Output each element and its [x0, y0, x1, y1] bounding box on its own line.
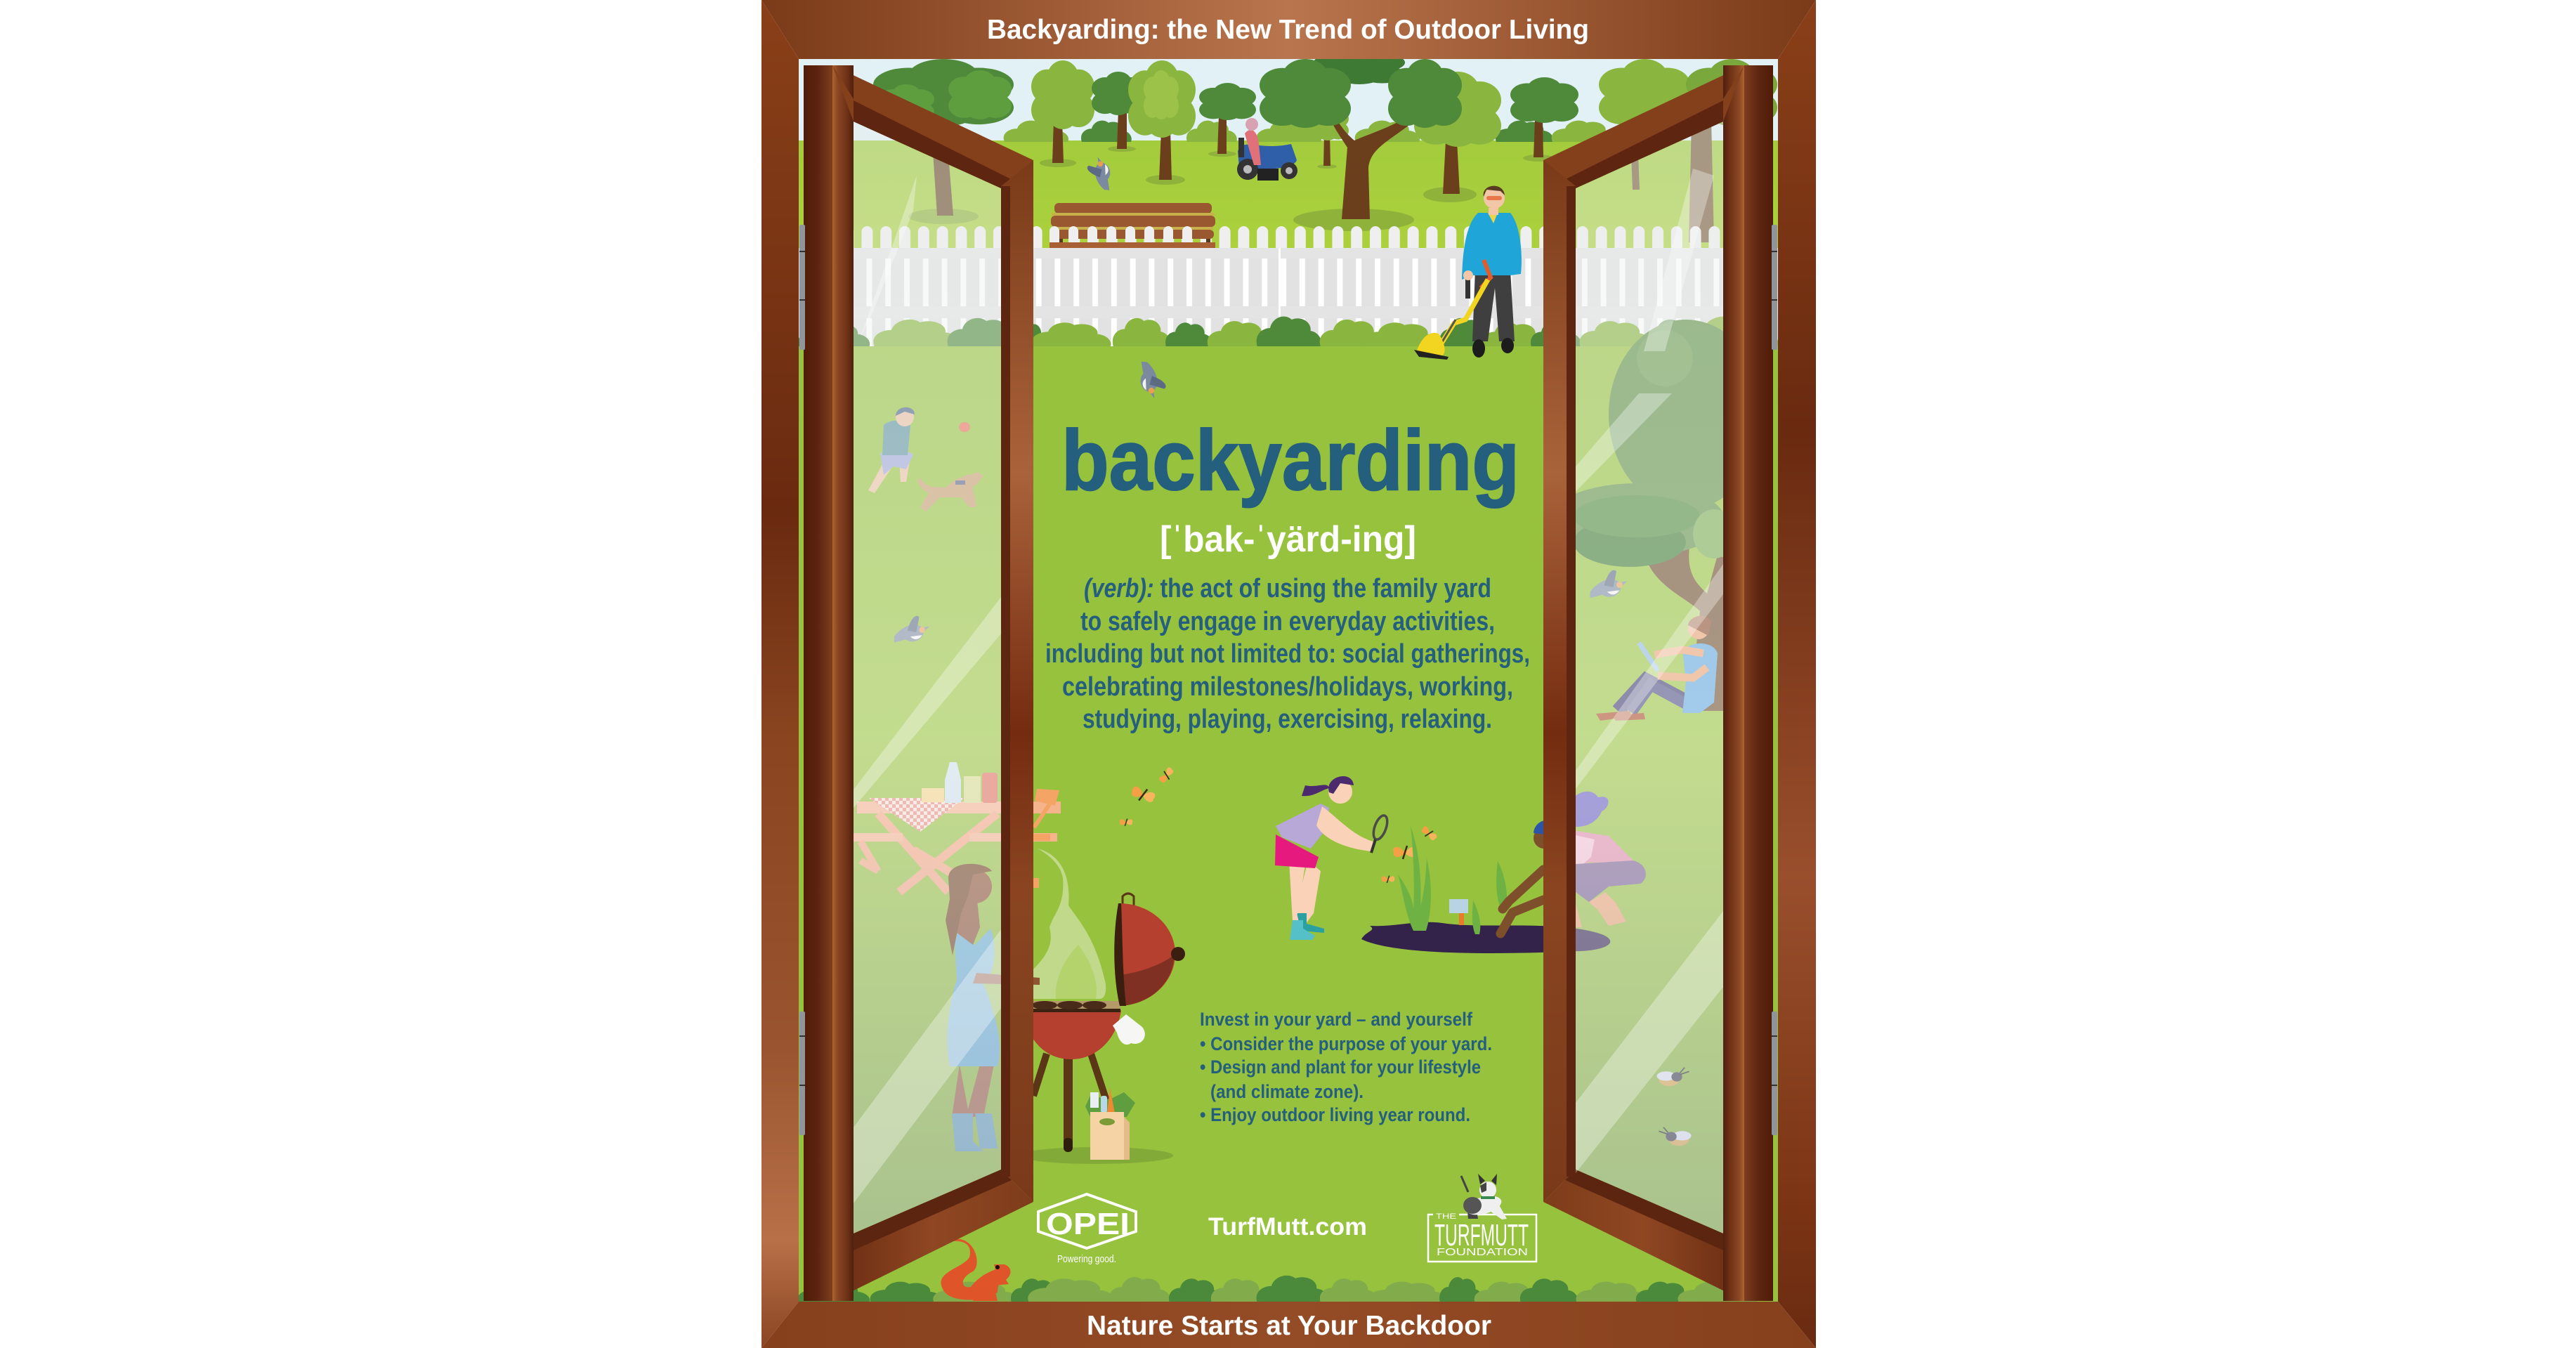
bird behind left glass — [894, 616, 929, 643]
tips list: • Enjoy outdoor living year round. — [1200, 1104, 1470, 1125]
picnic table — [846, 762, 1061, 892]
tips list: Invest in your yard – and yourself — [1200, 1009, 1473, 1030]
plants — [1398, 826, 1507, 934]
man with string trimmer — [1414, 186, 1522, 360]
definition: celebrating milestones/holidays, working, — [1062, 672, 1513, 702]
plant marker — [1449, 899, 1468, 925]
TurfMutt Foundation logo: THE — [1436, 1212, 1456, 1221]
frame right side — [1778, 0, 1816, 1348]
tree dark right — [1510, 77, 1578, 162]
hinges — [799, 225, 805, 1135]
grocery bag — [1085, 1087, 1135, 1160]
tips list: • Design and plant for your lifestyle — [1200, 1056, 1481, 1078]
tips list — [1200, 1009, 1492, 1125]
reader's tree — [1576, 320, 1723, 711]
door post — [804, 65, 832, 1301]
big centre tree — [1260, 49, 1462, 231]
scene: backyard behind the doors — [798, 49, 1779, 1303]
frame bottom band — [761, 1302, 1816, 1348]
frame top band — [761, 0, 1816, 59]
grill lid — [1114, 894, 1185, 1006]
picket fence — [799, 225, 1778, 346]
small tree centre — [1307, 105, 1349, 169]
bird in yard — [1085, 156, 1112, 190]
tree dark small — [1092, 72, 1145, 152]
girl with magnifying glass — [1275, 776, 1390, 940]
right door — [1543, 65, 1777, 1301]
definition: including but not limited to: social gatherings, — [1045, 639, 1530, 669]
definition: studying, playing, exercising, relaxing. — [1083, 705, 1492, 734]
glass reflections left — [854, 176, 1001, 1203]
grill — [1019, 894, 1185, 1164]
gardener kneeling — [1501, 792, 1646, 934]
OPEI logo: OPEI — [1046, 1207, 1130, 1241]
glass pane — [854, 122, 1001, 1234]
website: TurfMutt.com — [1208, 1213, 1367, 1241]
bird foreground top — [1138, 362, 1168, 399]
dog — [1461, 1174, 1507, 1219]
door outer stile — [1001, 160, 1033, 1202]
bees — [1656, 1068, 1692, 1146]
TurfMutt Foundation logo: TURFMUTT — [1434, 1218, 1529, 1252]
tree light right — [1414, 72, 1501, 202]
garden bed — [1361, 826, 1610, 953]
top heading: Backyarding: the New Trend of Outdoor Living — [987, 15, 1589, 45]
bird behind right glass — [1590, 570, 1627, 598]
oven mitt — [1113, 1014, 1145, 1045]
ball — [959, 422, 970, 432]
definition — [1045, 574, 1530, 734]
horizon bushes — [1004, 121, 1616, 142]
tips list: • Consider the purpose of your yard. — [1200, 1033, 1492, 1054]
OPEI logo: Powering good. — [1057, 1253, 1116, 1265]
butterflies — [1120, 766, 1439, 883]
main word: backyarding — [1061, 412, 1519, 508]
hedge along the fence — [798, 317, 1779, 347]
TurfMutt Foundation logo: FOUNDATION — [1437, 1246, 1528, 1258]
tree large right behind door — [1599, 59, 1777, 242]
dog — [918, 472, 983, 511]
tree light narrow — [1031, 60, 1094, 167]
tree left behind door — [873, 59, 1014, 224]
person reading — [1596, 616, 1718, 721]
definition: to safely engage in everyday activities, — [1080, 607, 1495, 636]
back lawn — [799, 140, 1778, 348]
woman in blue dress — [946, 864, 1040, 1151]
squirrel — [941, 1239, 1010, 1301]
definition: (verb): the act of using the family yard — [1084, 574, 1491, 603]
bench — [1050, 203, 1215, 248]
TurfMutt Foundation logo — [1428, 1174, 1536, 1262]
riding mower with person — [1237, 118, 1297, 181]
door inner stile — [832, 65, 854, 1301]
bottom heading: Nature Starts at Your Backdoor — [1087, 1311, 1491, 1341]
left door — [799, 65, 1033, 1301]
frame left side — [761, 0, 799, 1348]
tips list: (and climate zone). — [1210, 1081, 1364, 1102]
glass reflections right — [1576, 169, 1723, 1173]
tree dark behind mower — [1199, 83, 1256, 157]
tree light tall — [1128, 60, 1196, 185]
sky — [799, 59, 1778, 142]
chair — [1033, 789, 1059, 888]
boy running — [868, 407, 915, 493]
door frame top rail — [832, 65, 1033, 188]
outer frame — [761, 0, 1816, 1348]
OPEI logo — [1038, 1194, 1136, 1265]
grill smoke — [1033, 849, 1106, 999]
door frame bottom rail — [832, 1170, 1033, 1301]
bottom hedge — [798, 1276, 1757, 1303]
pronunciation: [ˈbak-ˈyärd-ing] — [1160, 519, 1416, 560]
foreground lawn — [799, 346, 1778, 1302]
